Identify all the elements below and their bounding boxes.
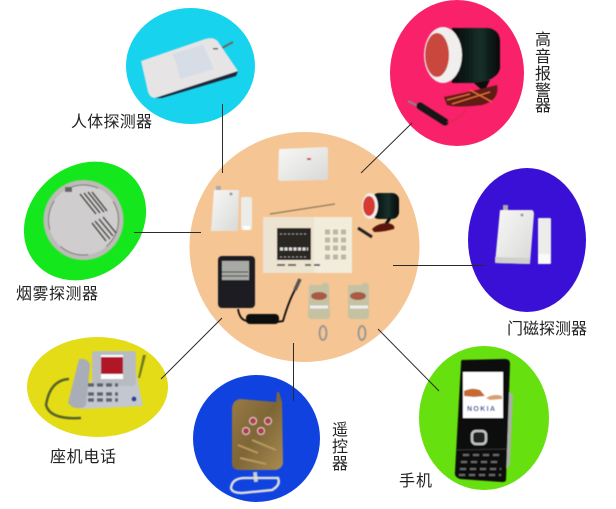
label: siren (vertical): 高 [535, 31, 551, 49]
label: PIR detector: 人体探测器 [71, 113, 152, 131]
label: remote control (vertical) [332, 421, 348, 473]
icon: central siren [358, 193, 399, 237]
label: landline phone: 座机电话 [50, 448, 116, 466]
icon: siren [408, 27, 500, 122]
icon: central PIR detector [278, 147, 328, 181]
label: siren (vertical) [535, 31, 551, 115]
label: remote control (vertical): 器 [332, 455, 348, 473]
panel: door magnetic sensor [468, 168, 586, 312]
icon: phone [455, 359, 513, 482]
icon: key fob right [348, 282, 369, 340]
panel: smoke detector [0, 137, 170, 305]
panel: landline phone [27, 337, 168, 437]
icon: central door sensor [211, 186, 252, 231]
label: siren (vertical): 报 [535, 65, 551, 83]
label: door sensor: 门磁探测器 [507, 320, 587, 338]
connector lines [134, 104, 485, 401]
icon: alarm control panel [263, 204, 352, 273]
icon: power adapter [218, 256, 300, 324]
panel: mobile phone [419, 346, 549, 490]
icon: PIR detector [141, 38, 238, 98]
icon: door sensor [495, 205, 551, 264]
label: mobile phone: 手机 [399, 472, 432, 490]
label: smoke detector: 烟雾探测器 [16, 285, 98, 303]
panel: central control circle [190, 132, 420, 362]
label: siren (vertical): 警 [535, 82, 551, 100]
label: remote control (vertical): 遥 [332, 421, 348, 439]
icon: smoke detector [44, 180, 124, 260]
label: siren (vertical): 音 [535, 48, 551, 66]
label: siren (vertical): 器 [535, 97, 551, 115]
label: remote control (vertical): 控 [332, 438, 348, 456]
panel: remote control [193, 375, 320, 502]
panel: PIR body detector [126, 8, 255, 124]
panel: siren [390, 0, 524, 146]
icon: remote fob [231, 392, 283, 493]
icon: key fob left [308, 282, 330, 340]
icon: landline phone [46, 351, 146, 418]
icon: phone: NOKIA [467, 406, 495, 413]
